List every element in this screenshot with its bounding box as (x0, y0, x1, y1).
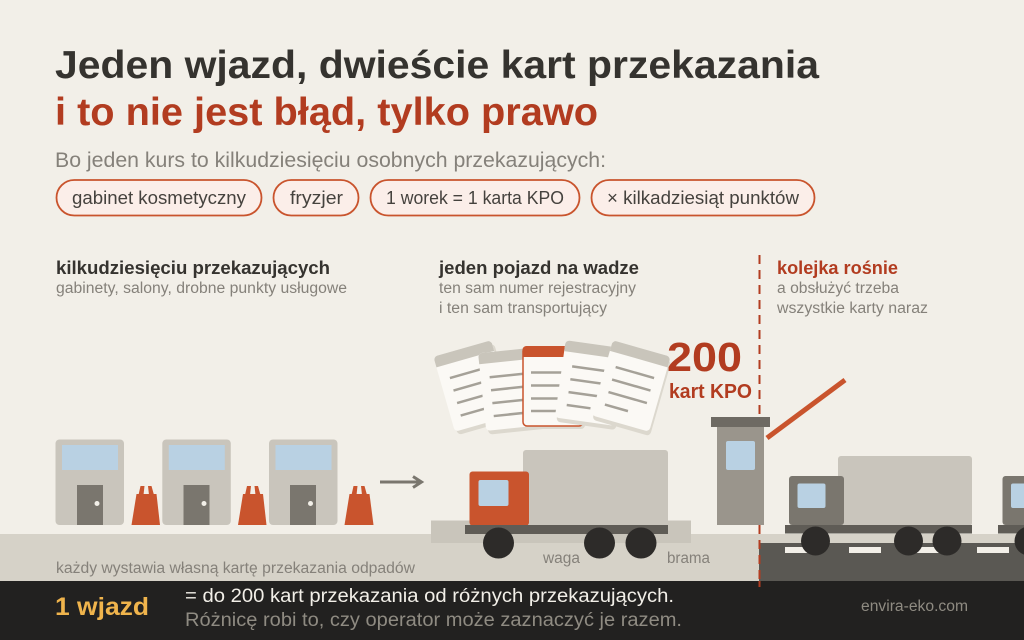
icon: building 2 (162, 440, 231, 525)
column heading: przekazujący (56, 258, 347, 297)
icon: bag 3 (344, 486, 374, 525)
column heading: kolejka: kolejka rośnie (777, 258, 898, 278)
title (55, 44, 819, 134)
title: Jeden wjazd, dwieście kart przekazania (55, 44, 819, 87)
tag pills: × kilkadziesiąt punktów (607, 188, 800, 208)
column heading: kolejka: a obsłużyć trzeba (777, 280, 899, 297)
document 5 (590, 340, 673, 436)
footer bar (0, 581, 1024, 640)
document 4 (554, 340, 627, 430)
footer text: Różnicę robi to, czy operator może zaznaczyć je razem. (185, 610, 682, 631)
column heading: kolejka (776, 258, 928, 317)
subtitle: Bo jeden kurs to kilkudziesięciu osobnych przekazujących: (55, 149, 606, 172)
callout: 200 kart KPO: 200 (667, 334, 742, 380)
column heading: przekazujący: gabinety, salony, drobne punkty usługowe (56, 280, 347, 297)
callout: 200 kart KPO: kart KPO (669, 381, 752, 403)
icon: building 1 (56, 440, 124, 525)
source url: envira-eko.com (861, 598, 968, 615)
queue truck 2 (998, 476, 1024, 556)
icon: building 3 (269, 440, 338, 525)
weighbridge plate (431, 520, 691, 543)
queue truck 1 (785, 456, 972, 556)
tag pills: fryzjer (290, 188, 343, 208)
title: i to nie jest błąd, tylko prawo (55, 91, 598, 134)
document 3 (highlighted) (522, 346, 585, 429)
document 1 (433, 340, 516, 436)
gate booth (711, 417, 770, 525)
truck on scale (465, 450, 668, 558)
callout: 200 kart KPO (667, 334, 752, 403)
column heading: pojazd: jeden pojazd na wadze (438, 258, 639, 278)
tag pills: 1 worek = 1 karta KPO (386, 188, 564, 208)
column heading: pojazd: i ten sam transportujący (439, 300, 607, 317)
ground caption: każdy wystawia własną kartę przekazania odpadów (56, 560, 416, 577)
icon: bag 2 (238, 486, 266, 525)
tag pills: gabinet kosmetyczny (72, 188, 246, 208)
footer text: = do 200 kart przekazania od różnych przekazujących. (185, 586, 674, 607)
road (759, 534, 1024, 581)
column heading: pojazd (438, 258, 639, 317)
column heading: pojazd: ten sam numer rejestracyjny (439, 280, 636, 297)
divider: dashed line (758, 255, 760, 587)
ground strip (0, 534, 760, 581)
icon: bag 1 (132, 486, 160, 525)
tag pills (56, 180, 814, 216)
column heading: przekazujący: kilkudziesięciu przekazujących (56, 258, 330, 278)
scale label: waga (542, 550, 580, 567)
footer headline: 1 wjazd (55, 593, 149, 621)
gate label: brama (667, 550, 710, 567)
column heading: kolejka: wszystkie karty naraz (776, 300, 928, 317)
arrow (380, 476, 422, 488)
document stack (433, 340, 673, 436)
document 2 (478, 347, 548, 435)
footer text (185, 586, 682, 631)
gate barrier (767, 380, 845, 438)
